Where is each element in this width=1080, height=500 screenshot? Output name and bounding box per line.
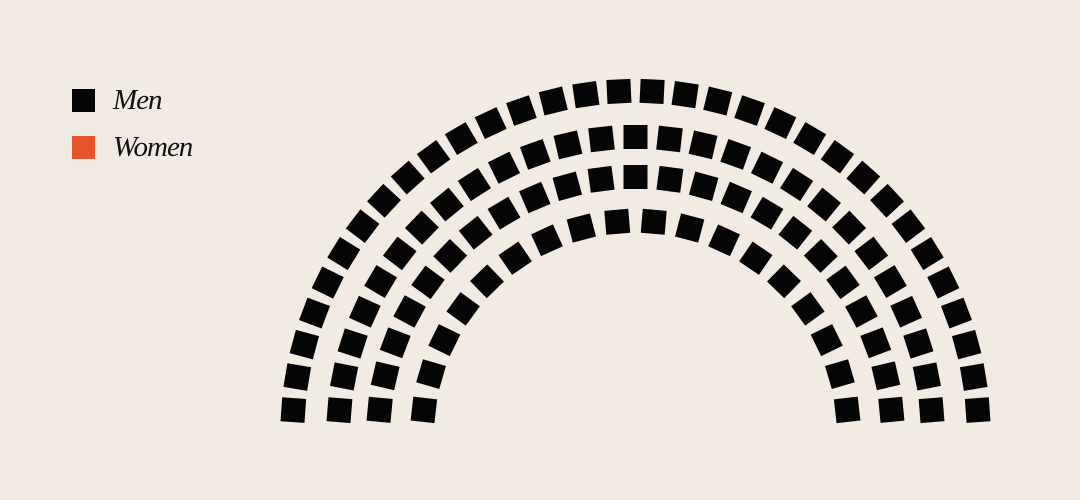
legend: women: Women: [113, 131, 192, 163]
row 3: [367, 165, 904, 423]
row 2: [327, 125, 944, 423]
row 1 outer: [281, 79, 990, 423]
legend: women: [72, 131, 192, 163]
legend: men: [72, 84, 162, 116]
legend: men: Men: [113, 84, 162, 116]
row 4 inner: [411, 209, 860, 423]
